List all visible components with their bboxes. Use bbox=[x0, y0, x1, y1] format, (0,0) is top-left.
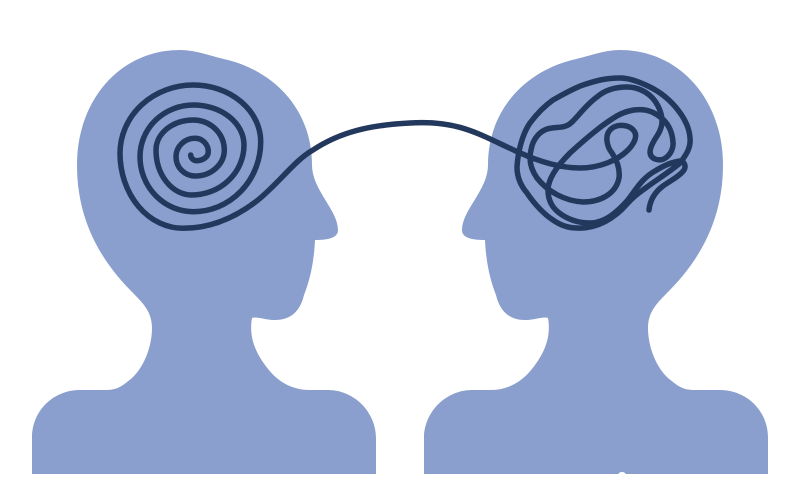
left head silhouette bbox=[32, 50, 376, 474]
right head silhouette bbox=[424, 50, 768, 474]
connecting line: tidy spiral to tangled knot bbox=[120, 78, 690, 228]
small notch at bottom of right head bbox=[618, 472, 626, 476]
